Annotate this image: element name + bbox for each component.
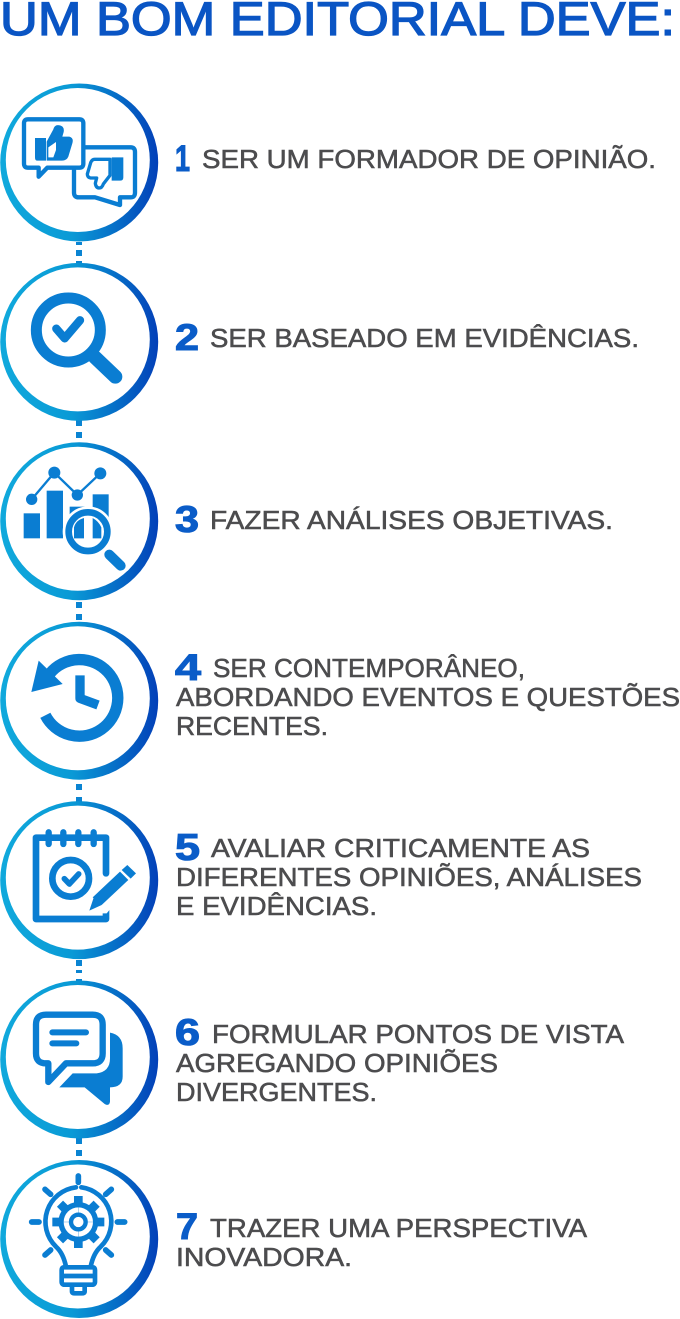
text 5: E EVIDÊNCIAS. <box>176 892 377 921</box>
step 2 <box>0 263 639 421</box>
ring 7 <box>0 1160 158 1318</box>
number 6: 6 <box>175 1012 200 1053</box>
number 5: 5 <box>175 827 200 868</box>
text 5 <box>176 835 642 921</box>
icon: thumbs up and down speech bubbles <box>24 119 135 205</box>
ring 4 <box>0 622 158 780</box>
text 7: INOVADORA. <box>176 1244 352 1272</box>
text 2: SER BASEADO EM EVIDÊNCIAS. <box>210 324 639 353</box>
step 3 <box>0 442 613 600</box>
text 3: FAZER ANÁLISES OBJETIVAS. <box>210 506 613 535</box>
number 2: 2 <box>175 317 199 358</box>
text 4 <box>176 654 680 741</box>
number 4: 4 <box>175 647 202 688</box>
text 6: FORMULAR PONTOS DE VISTA <box>212 1021 624 1049</box>
text 1: SER UM FORMADOR DE OPINIÃO. <box>202 145 656 174</box>
icon: two speech bubbles <box>36 1015 123 1105</box>
number 3: 3 <box>175 499 199 540</box>
text 6 <box>176 1021 624 1107</box>
ring 2 <box>0 263 158 421</box>
text 5: DIFERENTES OPINIÕES, ANÁLISES <box>176 863 642 892</box>
text 4: ABORDANDO EVENTOS E QUESTÕES <box>176 683 680 712</box>
icon: notepad with check and pencil <box>36 832 140 919</box>
text 6: AGREGANDO OPINIÕES <box>176 1049 498 1078</box>
ring 5 <box>0 801 158 959</box>
ring 1 <box>0 84 158 242</box>
text 7: TRAZER UMA PERSPECTIVA <box>210 1215 587 1243</box>
icon: clock with back arrow <box>31 660 118 736</box>
number 1: 1 <box>175 138 190 179</box>
number 7: 7 <box>176 1206 198 1247</box>
icon: bar chart with magnifier <box>24 467 121 566</box>
step 6 <box>0 980 624 1138</box>
ring 6 <box>0 980 158 1138</box>
icon: magnifier with check <box>36 298 115 377</box>
step 5 <box>0 801 642 959</box>
ring 3 <box>0 442 158 600</box>
step 7 <box>0 1160 587 1318</box>
dotted connector <box>76 242 82 1156</box>
text 5: AVALIAR CRITICAMENTE AS <box>211 835 590 863</box>
step 4 <box>0 622 680 780</box>
step 1 <box>0 84 656 242</box>
icon: light bulb with gear <box>32 1176 125 1293</box>
text 6: DIVERGENTES. <box>176 1079 377 1107</box>
text 4: SER CONTEMPORÂNEO, <box>213 654 525 683</box>
text 4: RECENTES. <box>176 713 328 741</box>
text 7 <box>176 1215 587 1272</box>
